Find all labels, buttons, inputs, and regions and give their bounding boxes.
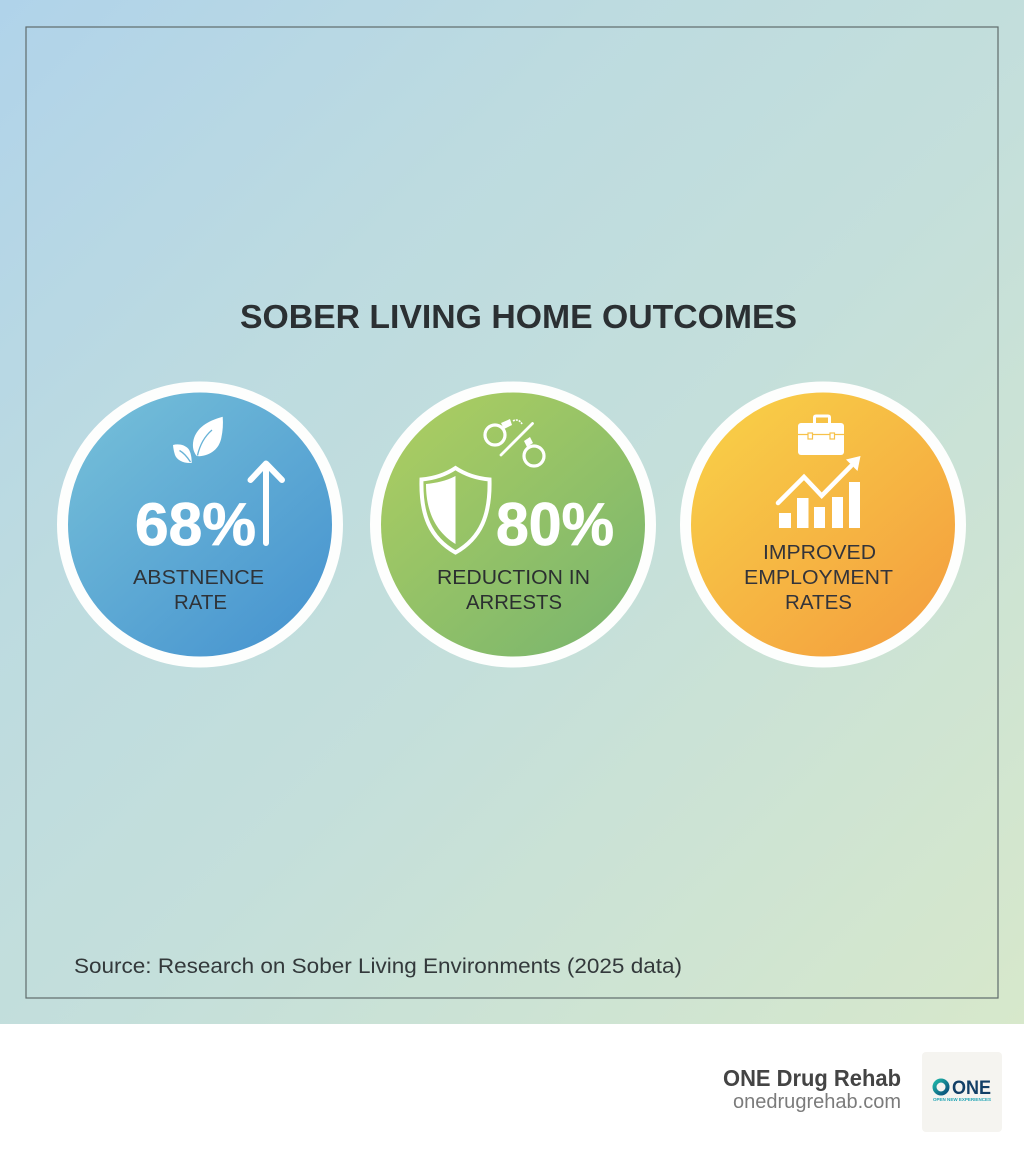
icon: shield (421, 468, 490, 552)
brand website: onedrugrehab.com (733, 1091, 901, 1113)
icon: upward arrow (250, 464, 282, 543)
panel: abstinence rate (62, 387, 338, 662)
stat: 68%: 68% (135, 491, 256, 558)
label: reduction in arrests: REDUCTION IN (437, 566, 590, 589)
panel: reduction in arrests (376, 387, 650, 662)
source note: Source: Research on Sober Living Environments (2025 data) (74, 955, 682, 978)
title: SOBER LIVING HOME OUTCOMES (240, 298, 797, 335)
logo card (922, 1052, 1002, 1132)
circle badge: green (376, 387, 650, 662)
stat: 80%: 80% (496, 491, 614, 558)
logo tagline: OPEN NEW EXPERIENCES (933, 1097, 992, 1103)
label: improved employment rates (744, 541, 893, 614)
label: improved employment rates: RATES (785, 591, 852, 614)
label: abstinence rate: RATE (174, 591, 227, 614)
circle badge: blue (62, 387, 338, 662)
label: improved employment rates: EMPLOYMENT (744, 566, 893, 589)
label: reduction in arrests: ARRESTS (466, 591, 562, 614)
label: reduction in arrests (437, 566, 590, 614)
footer bar (0, 1024, 1024, 1154)
icon: logo ring (934, 1080, 948, 1094)
logo wordmark: ONE (952, 1078, 991, 1099)
label: improved employment rates: IMPROVED (763, 541, 876, 564)
brand name: ONE Drug Rehab (723, 1065, 901, 1091)
thin frame border (26, 27, 998, 998)
icon: growth bar chart (778, 456, 860, 528)
label: abstinence rate: ABSTNENCE (133, 566, 264, 589)
icon: briefcase (798, 416, 844, 455)
circle badge: orange (686, 387, 960, 662)
icon: leaves (173, 417, 223, 463)
icon: handcuffs with percent slash (485, 419, 544, 466)
panel: improved employment rates (686, 387, 960, 662)
label: abstinence rate (133, 566, 264, 614)
